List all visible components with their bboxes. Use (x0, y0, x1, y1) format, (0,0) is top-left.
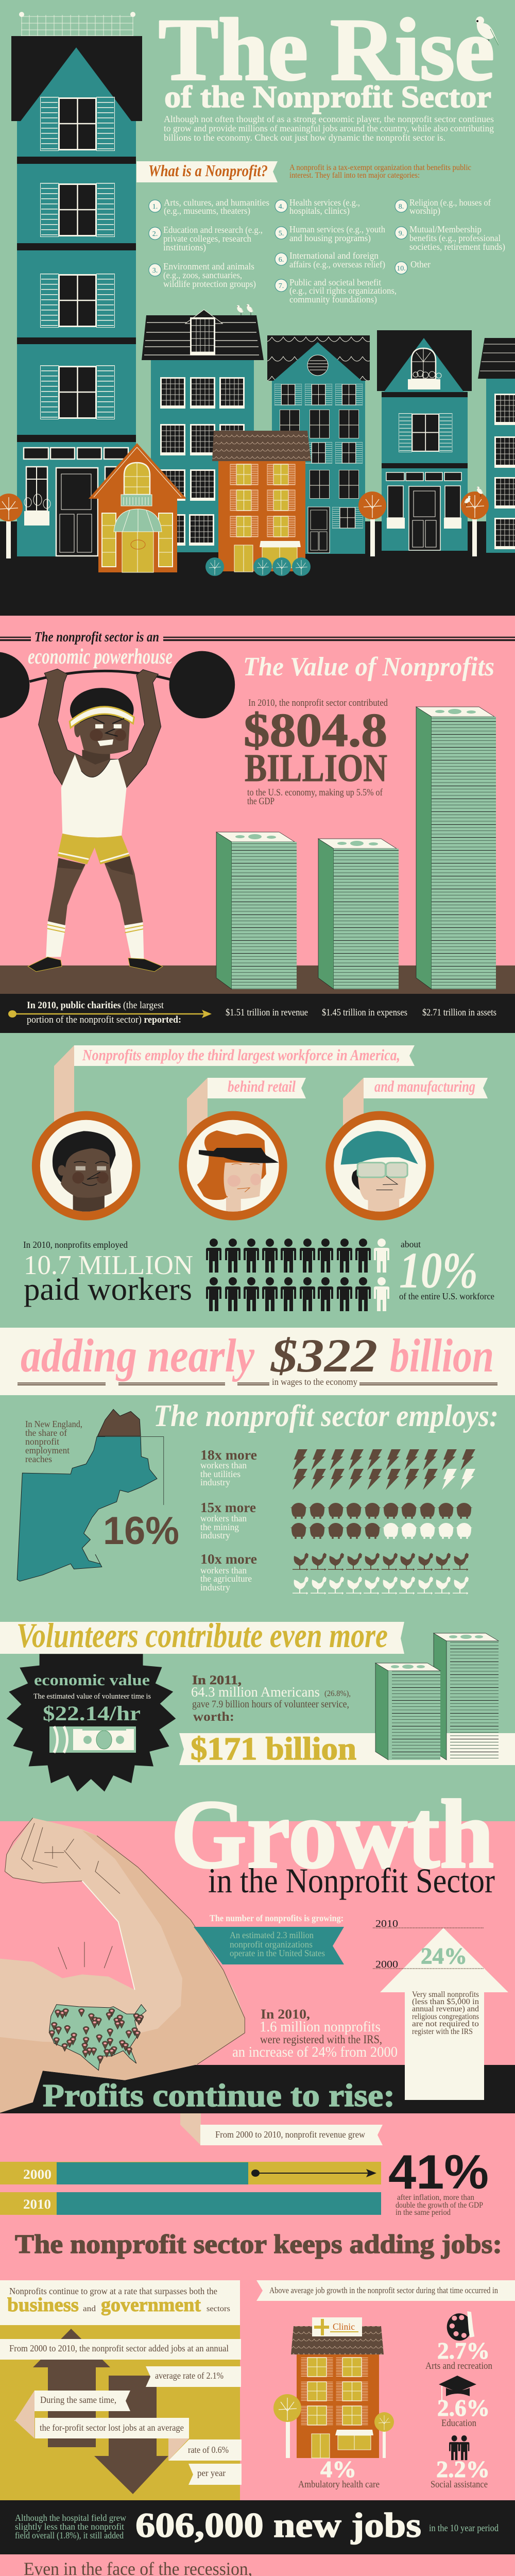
band: 606,000 new jobs: field overall (1.8%), it still added (15, 2530, 124, 2541)
ten categories list: 2. (152, 230, 158, 238)
ten categories list: worship) (409, 206, 440, 216)
volunteers banner: Volunteers contribute even more (16, 1616, 388, 1655)
ten categories list: 10. (397, 265, 406, 273)
public charities band: In 2010, public charities (the largest (27, 1000, 164, 1011)
panel: business and government sectors: Nonprofits continue to grow at a rate that surpasses both the (9, 2286, 217, 2296)
workforce ribbons: behind retail (228, 1077, 296, 1095)
flexed arm with U.S. map (0, 1818, 245, 2113)
public charities band: $1.45 trillion in expenses (322, 1007, 407, 1018)
panel: business and government sectors: and (83, 2304, 96, 2313)
workforce ribbons: and manufacturing (374, 1077, 475, 1095)
ten categories list: community foundations) (289, 294, 377, 305)
panel: business and government sectors: the for-profit sector lost jobs at an average (40, 2422, 184, 2433)
arrow: for-profit jobs down (94, 2376, 168, 2494)
starburst: economic value: The estimated value of volunteer time is (33, 1692, 151, 1701)
arrow: 24 percent growth: 2000 (375, 1959, 398, 1970)
comparison: mining: the mining (200, 1522, 239, 1532)
ten categories list: Mutual/Membership (409, 224, 482, 234)
stat: 171 billion: In 2011, (192, 1673, 242, 1687)
stat: education: Education (441, 2418, 476, 2429)
stat: 10 percent: about (401, 1239, 421, 1249)
stat: 1.6 million nonprofits: were registered with the IRS, (260, 2033, 382, 2046)
bar chart: revenue 2000 vs 2010: 2010 (23, 2197, 51, 2212)
title: of the Nonprofit Sector (164, 80, 491, 114)
ten categories list: (e.g., museums, theaters) (164, 206, 250, 216)
house with scalloped roof (267, 335, 370, 554)
stat: 10.7 million paid workers: 10.7 MILLION (24, 1250, 193, 1280)
nonprofit definition (289, 163, 471, 180)
stat: 41 percent: 41% (388, 2145, 489, 2199)
ten categories list: Human services (e.g., youth (289, 224, 385, 235)
wages strip: adding nearly (21, 1329, 255, 1382)
ten categories list: 7. (279, 282, 284, 290)
arrow: 24 percent growth: annual revenue) and (412, 2005, 479, 2013)
comparison: agriculture: 10x more (200, 1551, 257, 1567)
panel: business and government sectors: business (7, 2294, 79, 2316)
stat: 804.8 billion: the GDP (247, 796, 274, 807)
clinic sign: Clinic (333, 2321, 355, 2332)
heading: growth: Growth (171, 1781, 494, 1889)
stat: 1.6 million nonprofits (232, 2007, 398, 2060)
starburst: economic value: economic value (34, 1671, 150, 1689)
stat: arts and recreation: 2.7% (437, 2337, 490, 2364)
ten categories list: 8. (399, 203, 404, 211)
wages strip (0, 1328, 515, 1395)
intro paragraph: Although not often thought of as a strong economic player, the nonprofit sector continues (164, 114, 494, 124)
birds (237, 16, 500, 506)
stat: 171 billion (179, 1673, 515, 1767)
stat: 804.8 billion (244, 698, 388, 807)
intro paragraph (164, 114, 494, 143)
stat: ambulatory health care (298, 2456, 380, 2490)
intro paragraph: billions to the economy. Check out just how dynamic the nonprofit sector is. (164, 132, 445, 143)
ten categories list: Arts, cultures, and humanities (164, 197, 269, 208)
ribbon: revenue grew (180, 2113, 383, 2145)
stat: 41 percent: double the growth of the GDP (396, 2201, 483, 2210)
map: New England (17, 1409, 179, 1581)
stat: education: 2.6% (437, 2395, 490, 2421)
arrow: nonprofit jobs up (33, 2329, 110, 2447)
panel: business and government sectors: rate of 0.6% (188, 2445, 229, 2455)
orange gabled house (89, 443, 186, 572)
map: New England: nonprofit (25, 1436, 59, 1447)
tall left townhouse (11, 12, 142, 556)
band: 606,000 new jobs (0, 2500, 515, 2554)
intro paragraph: to grow and provide millions of meaningful jobs around the country, while also contributing (164, 123, 494, 133)
map: New England: In New England, (25, 1419, 82, 1429)
ten categories list: 9. (399, 230, 404, 238)
stat: ambulatory health care: 4% (320, 2456, 356, 2482)
house with arched dormer (377, 330, 472, 551)
heading: keeps adding jobs: The nonprofit sector keeps adding jobs: (15, 2230, 502, 2259)
ten categories list: (e.g., civil rights organizations, (289, 285, 397, 296)
stat: 10 percent: of the entire U.S. workforce (399, 1291, 494, 1301)
stat: 804.8 billion: to the U.S. economy, making up 5.5% of (247, 787, 383, 798)
comparison: utilities (200, 1447, 475, 1490)
map: New England: 16% (103, 1509, 179, 1553)
ten categories list: wildlife protection groups) (163, 279, 256, 290)
ten categories list: 1. (152, 203, 158, 211)
arrow: 24 percent growth (373, 1918, 508, 2100)
ten categories list: institutions) (163, 242, 206, 253)
portraits (32, 1111, 434, 1221)
ribbon: above average job growth (256, 2280, 515, 2301)
comparison: utilities: 18x more (200, 1447, 257, 1463)
stat: 171 billion: (26.8%), (324, 1689, 351, 1698)
arrow: 24 percent growth: are not required to (412, 2020, 479, 2028)
stat: 10 percent: 10% (399, 1242, 478, 1299)
stat: 171 billion: gave 7.9 billion hours of volunteer service, (192, 1699, 349, 1710)
ten categories list: Education and research (e.g., (163, 225, 263, 235)
street trees (0, 492, 489, 558)
ten categories list: 6. (279, 256, 284, 264)
wages strip: in wages to the economy (272, 1377, 357, 1387)
house with shingle roof and grid windows (142, 310, 264, 552)
arrow: 24 percent growth: register with the IRS (412, 2027, 473, 2036)
starburst: economic value: $22.14/hr (43, 1702, 141, 1725)
comparison: agriculture (200, 1551, 469, 1595)
heading: the value of nonprofits: The Value of Nonprofits (243, 652, 494, 682)
title: The Rise (159, 1, 494, 99)
comparison: utilities: the utilities (200, 1469, 241, 1479)
stat: 804.8 billion: $804.8 (244, 704, 387, 756)
ribbon: number of nonprofits (194, 1913, 344, 1964)
stat: 10.7 million paid workers: In 2010, nonprofits employed (23, 1240, 128, 1250)
map: New England: reaches (25, 1454, 52, 1464)
workforce ribbons: Nonprofits employ the third largest workforce in America, (82, 1046, 400, 1064)
stat: 1.6 million nonprofits: an increase of 24% from 2000 (232, 2044, 398, 2060)
ten categories list: 3. (152, 267, 158, 275)
banner: what is a nonprofit: What is a Nonprofit? (148, 161, 268, 180)
map: New England: the share of (25, 1428, 67, 1438)
ten categories list: hospitals, clinics) (289, 206, 350, 216)
stat: 804.8 billion: BILLION (245, 747, 387, 790)
stat: social assistance: Social assistance (431, 2479, 488, 2490)
stat: arts and recreation (425, 2311, 492, 2371)
ribbon: number of nonprofits: An estimated 2.3 million (230, 1930, 314, 1940)
portrait: man in hard hat (325, 1111, 434, 1221)
clinic sign (312, 2317, 362, 2336)
ten categories list: private colleges, research (163, 233, 251, 244)
ten categories list: affairs (e.g., overseas relief) (289, 259, 385, 270)
stat: social assistance (431, 2435, 490, 2490)
panel: business and government sectors: government (101, 2294, 201, 2316)
arrow: 24 percent growth: 24% (421, 1943, 467, 1969)
panel: business and government sectors: average rate of 2.1% (155, 2370, 224, 2381)
ten categories list: benefits (e.g., professional (409, 233, 501, 244)
wages strip: billion (390, 1329, 494, 1382)
comparison: agriculture: industry (200, 1582, 230, 1592)
section intro: economic powerhouse (0, 629, 515, 669)
map: New England: employment (25, 1445, 70, 1455)
stat: 10.7 million paid workers (23, 1240, 193, 1307)
workforce ribbons (54, 1045, 488, 1136)
ten categories list: Environment and animals (163, 261, 254, 272)
public charities band: $2.71 trillion in assets (422, 1007, 496, 1018)
ten categories list: (e.g., zoos, sanctuaries, (163, 270, 242, 281)
portrait: retail worker (32, 1111, 140, 1221)
stat: 41 percent: in the same period (396, 2208, 451, 2217)
ten categories list: and housing programs) (289, 233, 371, 244)
ten categories list: Health services (e.g., (289, 197, 360, 208)
band: 606,000 new jobs: in the 10 year period (429, 2523, 499, 2534)
arrow: charities reported (8, 1010, 212, 1018)
stat: 171 billion: $171 billion (191, 1732, 356, 1767)
panel: business and government sectors: sectors (207, 2304, 230, 2313)
panel: business and government sectors: During the same time, (40, 2395, 116, 2405)
comparison: mining (200, 1500, 473, 1540)
nonprofit definition: A nonprofit is a tax-exempt organization that benefits public (289, 163, 471, 172)
orange apartment house (205, 431, 311, 576)
stat: arts and recreation: Arts and recreation (425, 2361, 492, 2371)
stat: 171 billion: worth: (193, 1710, 234, 1724)
money stacks chart (216, 707, 496, 989)
bar chart: revenue 2000 vs 2010 (0, 2162, 381, 2215)
comparison: utilities: industry (200, 1477, 230, 1487)
section intro: economic powerhouse: economic powerhouse (28, 645, 173, 669)
stat: 804.8 billion: In 2010, the nonprofit sector contributed (248, 698, 388, 708)
comparison: mining: industry (200, 1530, 230, 1540)
stat: 41 percent: after inflation, more than (397, 2193, 474, 2202)
strongman lifting barbell (0, 651, 235, 972)
right edge house (478, 338, 515, 553)
arrow: 24 percent growth: Very small nonprofits (412, 1990, 479, 1999)
illustration: clinic building (273, 2317, 394, 2458)
ten categories list: Public and societal benefit (289, 277, 381, 287)
panel: business and government sectors: per year (197, 2468, 226, 2478)
wages strip: $322 (270, 1329, 377, 1382)
ten categories list: 4. (279, 203, 284, 211)
public charities band: $1.51 trillion in revenue (226, 1007, 308, 1018)
stat: 1.6 million nonprofits: In 2010, (261, 2007, 310, 2022)
ten categories list: societies, retirement funds) (409, 242, 505, 252)
comparison: mining: 15x more (200, 1500, 256, 1515)
ribbon: revenue grew: From 2000 to 2010, nonprofit revenue grew (215, 2129, 365, 2140)
heading: recession (24, 2558, 493, 2576)
ribbon: number of nonprofits: nonprofit organizations (230, 1939, 313, 1950)
ribbons: job growth rates (0, 2339, 242, 2485)
band: 606,000 new jobs: 606,000 new jobs (135, 2505, 421, 2545)
arrow: 24 percent growth: (less than $5,000 in (412, 1997, 479, 2006)
comparison: agriculture: the agriculture (200, 1573, 252, 1584)
band: 606,000 new jobs: slightly less than the nonprofit (15, 2521, 124, 2532)
section intro: economic powerhouse: The nonprofit sector is an (35, 629, 159, 645)
ten categories list: International and foreign (289, 250, 379, 261)
ribbon: number of nonprofits: operate in the United States (230, 1948, 325, 1958)
panel: business and government sectors (0, 2280, 242, 2500)
small money stacks (375, 1633, 499, 1760)
ten categories list: Other (410, 259, 431, 269)
black band: profits (0, 2065, 515, 2113)
comparison: mining: workers than (200, 1513, 247, 1523)
band: 606,000 new jobs: Although the hospital field grew (15, 2513, 126, 2523)
comparison: agriculture: workers than (200, 1565, 247, 1575)
panel: business and government sectors: From 2000 to 2010, the nonprofit sector added jobs at an annual (9, 2343, 229, 2353)
heading: profits continue to rise: Profits continue to rise: (43, 2078, 395, 2113)
public charities band: portion of the nonprofit sector) reported: (27, 1014, 181, 1025)
arrow: growth (251, 2169, 376, 2177)
public charities band (8, 1000, 496, 1025)
stat: 1.6 million nonprofits: 1.6 million nonprofits (260, 2019, 381, 2035)
ten categories list: 5. (279, 230, 284, 238)
ten categories list (149, 197, 505, 305)
people icons: one in ten workers (206, 1239, 389, 1311)
icon: twenty dollar bill (49, 1726, 136, 1753)
ribbon: number of nonprofits: The number of nonprofits is growing: (210, 1913, 344, 1923)
stat: ambulatory health care: Ambulatory health care (298, 2479, 380, 2490)
stat: 171 billion: 64.3 million Americans (191, 1684, 320, 1700)
ten categories list: Religion (e.g., houses of (409, 197, 491, 208)
stat: 10.7 million paid workers: paid workers (24, 1272, 192, 1307)
stat: education (437, 2376, 490, 2429)
starburst: economic value (7, 1654, 176, 1791)
portrait: woman in visor (179, 1111, 287, 1221)
arrow: 24 percent growth: 2010 (375, 1918, 398, 1929)
stat: social assistance: 2.2% (436, 2456, 490, 2482)
bar chart: revenue 2000 vs 2010: 2000 (23, 2167, 52, 2182)
nonprofit definition: interest. They fall into ten major categories: (289, 171, 420, 180)
arrow: 24 percent growth: religious congregations (412, 2012, 479, 2021)
comparison: utilities: workers than (200, 1460, 247, 1470)
